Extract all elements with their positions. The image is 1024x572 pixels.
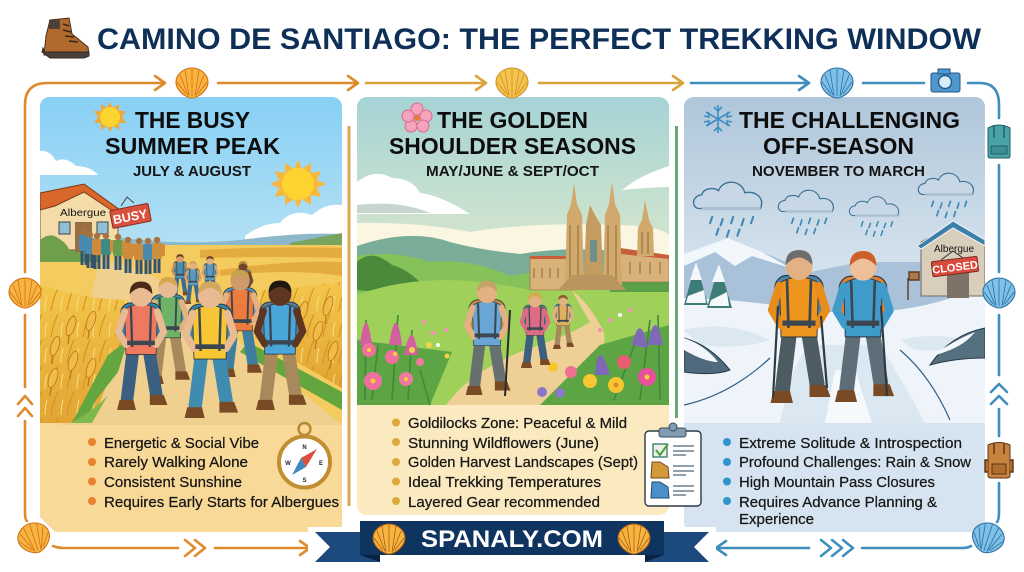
icon: sun bbox=[94, 102, 126, 132]
shell: top 2 bbox=[496, 68, 528, 98]
site name: SPANALY.COM bbox=[421, 526, 603, 553]
pine trees bbox=[684, 262, 732, 308]
shell: banner right bbox=[618, 524, 650, 554]
bullet list: Profound Challenges: Rain & Snow bbox=[739, 454, 971, 471]
shell: bottom right bbox=[968, 519, 1008, 557]
footpath bbox=[446, 290, 604, 405]
albergue building bbox=[40, 184, 120, 252]
bullet list: Layered Gear recommended bbox=[408, 494, 600, 511]
icon: flower bbox=[402, 103, 432, 132]
bullet list: Stunning Wildflowers (June) bbox=[408, 435, 599, 452]
bullet list bbox=[88, 435, 339, 511]
hikers bbox=[466, 281, 574, 396]
banner: spanaly.com bbox=[308, 521, 716, 568]
icon: compass: N bbox=[302, 445, 307, 451]
shell: top 3 bbox=[821, 68, 853, 98]
heading: SUMMER PEAK bbox=[105, 133, 280, 159]
clouds with rain bbox=[694, 173, 973, 237]
bullet list: Energetic & Social Vibe bbox=[104, 435, 259, 452]
rocks bbox=[684, 338, 730, 374]
icon: teal backpack bbox=[988, 125, 1010, 158]
illustration: winter scene bbox=[684, 97, 985, 423]
bullet list: High Mountain Pass Closures bbox=[739, 474, 935, 491]
heading bbox=[105, 107, 280, 159]
heading: THE CHALLENGING bbox=[739, 107, 960, 133]
bullet list bbox=[723, 435, 971, 528]
heading: SHOULDER SEASONS bbox=[389, 133, 636, 159]
icon: compass: S bbox=[302, 478, 307, 484]
panel: the golden shoulder seasons bbox=[357, 97, 669, 515]
bullet list: Extreme Solitude & Introspection bbox=[739, 435, 962, 452]
icon: snowflake bbox=[704, 105, 732, 133]
bullet list: Requires Early Starts for Albergues bbox=[104, 494, 339, 511]
signpost bbox=[908, 272, 919, 300]
icon: camera bbox=[931, 69, 960, 92]
panel: the challenging off-season bbox=[684, 97, 985, 532]
albergue closed: Albergue bbox=[934, 244, 974, 255]
albergue closed bbox=[917, 221, 985, 298]
route: gold middle bbox=[366, 76, 683, 90]
icon: gear checklist clipboard bbox=[645, 423, 701, 506]
bullet list: Experience bbox=[739, 511, 814, 528]
icon: compass: W bbox=[285, 461, 291, 467]
sign: busy: BUSY bbox=[112, 207, 149, 227]
shell: left bbox=[9, 278, 41, 308]
pilgrim queue bbox=[79, 229, 165, 274]
hikers foreground bbox=[117, 270, 307, 418]
shell: top 1 bbox=[176, 68, 208, 98]
sun bbox=[270, 160, 326, 208]
bullet list: Requires Advance Planning & bbox=[739, 494, 937, 511]
illustration: spring scene bbox=[357, 97, 669, 405]
heading bbox=[739, 107, 960, 159]
sign: busy bbox=[110, 197, 151, 228]
illustration: summer scene bbox=[40, 97, 342, 425]
subheading: NOVEMBER TO MARCH bbox=[752, 163, 925, 180]
icon: compass bbox=[279, 423, 330, 488]
heading: OFF-SEASON bbox=[763, 133, 914, 159]
hiker group behind bbox=[171, 254, 254, 304]
title: CAMINO DE SANTIAGO: THE PERFECT TREKKING WINDOW bbox=[97, 23, 982, 56]
subheading: MAY/JUNE & SEPT/OCT bbox=[426, 163, 599, 180]
route: blue right and bottom bbox=[691, 76, 1007, 556]
shell: bottom left bbox=[14, 519, 54, 557]
icon: compass: E bbox=[319, 461, 323, 467]
bullet list: Golden Harvest Landscapes (Sept) bbox=[408, 454, 638, 471]
heading: THE BUSY bbox=[135, 107, 250, 133]
albergue building: Albergue bbox=[60, 207, 106, 219]
albergue closed: CLOSED bbox=[932, 259, 979, 277]
route: orange top and left bbox=[18, 76, 358, 556]
shell: banner left bbox=[373, 524, 405, 554]
bullet list: Ideal Trekking Temperatures bbox=[408, 474, 601, 491]
meadow flowers bbox=[360, 308, 663, 405]
bullet list bbox=[392, 415, 638, 511]
vertical dividers bbox=[348, 126, 678, 506]
icon: hiking boot bbox=[42, 18, 89, 58]
hikers bbox=[770, 250, 894, 403]
bullet list: Rarely Walking Alone bbox=[104, 454, 248, 471]
heading bbox=[389, 107, 636, 159]
bullet list: Goldilocks Zone: Peaceful & Mild bbox=[408, 415, 627, 432]
panel: the busy summer peak bbox=[40, 97, 342, 532]
cathedral bbox=[530, 182, 669, 290]
subheading: JULY & AUGUST bbox=[133, 163, 251, 180]
heading: THE GOLDEN bbox=[437, 107, 588, 133]
wheat heads bbox=[46, 295, 340, 396]
bullet list: Consistent Sunshine bbox=[104, 474, 242, 491]
icon: brown backpack bbox=[985, 442, 1013, 478]
shell: right bbox=[983, 278, 1015, 308]
